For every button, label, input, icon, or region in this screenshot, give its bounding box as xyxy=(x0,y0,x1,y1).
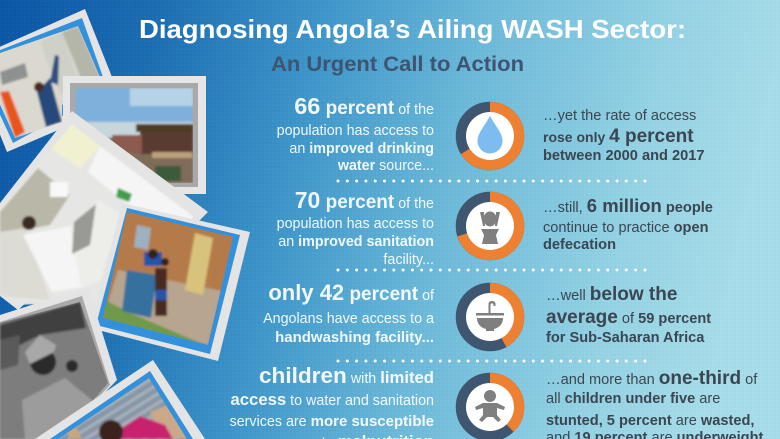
response: child stunting: all children under five are xyxy=(546,391,720,407)
photo: market scene xyxy=(63,76,206,194)
photo: children beside blue barrel xyxy=(90,203,250,361)
title: Diagnosing Angola’s Ailing WASH Sector: xyxy=(139,14,686,44)
statement: 66 percent water: water source... xyxy=(337,158,434,174)
statement: 70 percent sanitation xyxy=(277,187,434,268)
response: rate of access: …yet the rate of access xyxy=(543,108,696,124)
donut icon: water drop 66 percent xyxy=(461,107,519,165)
photo: technician at control panel xyxy=(0,9,112,152)
statement: 66 percent water: population has access to xyxy=(277,123,434,139)
statement: 66 percent water: an improved drinking xyxy=(289,141,434,157)
donut icon: baby 38 percent xyxy=(461,378,519,436)
statement: children malnutrition: access to water and sanitation xyxy=(230,390,434,409)
statement: children malnutrition: children with limited xyxy=(259,363,434,388)
donut icon: toilet 70 percent xyxy=(461,197,519,255)
statement: 70 percent sanitation: facility... xyxy=(383,252,434,268)
response: rate of access: rose only 4 percent xyxy=(543,126,694,147)
statement: 70 percent sanitation: 70 percent of the xyxy=(295,187,434,213)
response: below average: for Sub-Saharan Africa xyxy=(546,330,705,346)
photo: lab worker in white coat xyxy=(0,111,208,328)
response: child stunting: stunted, 5 percent are wasted, xyxy=(546,413,754,429)
response: below average xyxy=(546,284,711,346)
response: below average: average of 59 percent xyxy=(546,307,711,328)
response: child stunting: …and more than one-third of xyxy=(546,368,758,389)
photo: woman in pink at corrugated wall xyxy=(35,360,205,439)
response: rate of access: between 2000 and 2017 xyxy=(543,148,704,164)
statement: 66 percent water: 66 percent of the xyxy=(294,93,434,119)
statement: 42 percent handwashing: only 42 percent of xyxy=(268,280,434,305)
response: open defecation: continue to practice open xyxy=(543,220,709,236)
response: below average: …well below the xyxy=(546,284,677,305)
statement: 42 percent handwashing: Angolans have access to a xyxy=(263,311,434,327)
statement: children malnutrition: services are more susceptible xyxy=(230,413,434,430)
statement: 42 percent handwashing: handwashing facility... xyxy=(275,329,434,346)
subtitle: An Urgent Call to Action xyxy=(271,53,524,76)
response: open defecation: defecation xyxy=(543,237,616,253)
response: child stunting xyxy=(546,368,764,439)
statement: 70 percent sanitation: an improved sanitation xyxy=(278,234,434,250)
statement: 42 percent handwashing xyxy=(263,280,434,346)
statement: children malnutrition xyxy=(230,363,434,439)
photo: black and white portrait of a woman xyxy=(0,287,120,439)
dotted divider 3 xyxy=(338,360,645,362)
dotted divider 1 xyxy=(338,180,645,182)
response: rate of access xyxy=(543,108,704,164)
statement: 66 percent water xyxy=(277,93,434,174)
response: open defecation: …still, 6 million people xyxy=(543,195,713,216)
dotted divider 2 xyxy=(338,268,645,272)
statement: 70 percent sanitation: population has access to xyxy=(277,216,434,232)
response: open defecation xyxy=(543,195,713,253)
donut icon: sink 42 percent xyxy=(461,288,519,346)
